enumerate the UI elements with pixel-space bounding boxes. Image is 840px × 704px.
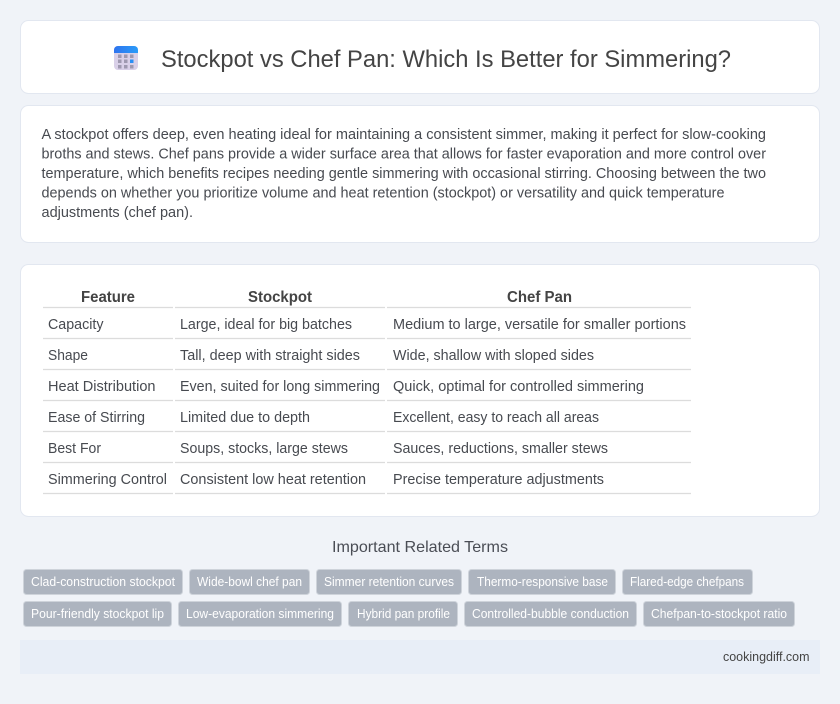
text block: introduction: depends on whether you prioritize volume and heat retention (stockpot) or versatility and quick temperature — [42, 186, 724, 202]
title: Stockpot vs Chef Pan: Which Is Better for Simmering? — [161, 46, 731, 73]
table row: shape: Shape — [48, 348, 88, 364]
table header row: Feature — [81, 289, 135, 306]
tag — [644, 602, 794, 626]
table header row: Stockpot — [248, 289, 313, 306]
text block: introduction: broths and stews. Chef pans provide a wider surface area that allows for faster evaporation and more control over — [42, 146, 766, 162]
table row: shape — [48, 348, 594, 364]
tag group: related terms — [24, 570, 794, 626]
tag: Simmer retention curves — [324, 575, 454, 589]
tag: Controlled-bubble conduction — [472, 607, 629, 621]
icon: calendar — [114, 46, 138, 70]
table row: ease of stirring: Excellent, easy to reach all areas — [393, 410, 599, 426]
table row: simmering control: Precise temperature adjustments — [393, 472, 604, 488]
table row: simmering control — [48, 472, 604, 488]
table row: best for: Best For — [48, 441, 101, 457]
panel: comparison table — [20, 264, 820, 516]
footer — [20, 640, 820, 674]
table header row: Chef Pan — [507, 289, 572, 306]
tag — [348, 602, 458, 626]
table row: simmering control: Simmering Control — [48, 472, 167, 488]
table row: shape: Tall, deep with straight sides — [180, 348, 360, 364]
table row: ease of stirring: Ease of Stirring — [48, 410, 145, 426]
tag: Thermo-responsive base — [477, 575, 608, 589]
tag: Chefpan-to-stockpot ratio — [651, 607, 787, 621]
table row: heat distribution — [48, 379, 644, 395]
tag — [468, 570, 616, 594]
tag: Wide-bowl chef pan — [197, 575, 302, 589]
tag — [622, 570, 752, 594]
table row: capacity: Medium to large, versatile for smaller portions — [393, 317, 686, 333]
table row: heat distribution: Even, suited for long simmering — [180, 379, 380, 395]
tag — [24, 602, 172, 626]
tag — [316, 570, 462, 594]
text block: introduction — [42, 127, 766, 221]
panel: introduction — [20, 106, 820, 242]
footer text: site name: cookingdiff.com — [723, 649, 810, 664]
tag — [178, 602, 342, 626]
table header row — [81, 289, 572, 306]
table row: heat distribution: Quick, optimal for controlled simmering — [393, 379, 644, 395]
text block: introduction: A stockpot offers deep, even heating ideal for maintaining a consistent simmer, making it perfect for slow-cooking — [42, 127, 766, 143]
panel: header — [20, 20, 820, 94]
tag: Low-evaporation simmering — [186, 607, 334, 621]
table row: shape: Wide, shallow with sloped sides — [393, 348, 594, 364]
table row: capacity: Large, ideal for big batches — [180, 317, 352, 333]
table row: capacity: Capacity — [48, 317, 104, 333]
table row: simmering control: Consistent low heat retention — [180, 472, 366, 488]
tag: Hybrid pan profile — [357, 607, 450, 621]
tag — [24, 570, 182, 594]
tag: Flared-edge chefpans — [630, 575, 744, 589]
tag: Pour-friendly stockpot lip — [31, 607, 164, 621]
tag — [464, 602, 636, 626]
text block: introduction: temperature, which benefits recipes needing gentle simmering with occasional stirring. Choosing between the two — [42, 166, 766, 182]
table row: best for: Soups, stocks, large stews — [180, 441, 348, 457]
tag: Clad-construction stockpot — [31, 575, 176, 589]
table row: capacity — [48, 317, 686, 333]
heading: important related terms: Important Related Terms — [332, 539, 508, 556]
table row: best for: Sauces, reductions, smaller stews — [393, 441, 608, 457]
text block: introduction: adjustments (chef pan). — [42, 205, 193, 221]
table row: ease of stirring: Limited due to depth — [180, 410, 310, 426]
table row: best for — [48, 441, 608, 457]
table row: heat distribution: Heat Distribution — [48, 379, 156, 395]
table row: ease of stirring — [48, 410, 599, 426]
tag — [190, 570, 310, 594]
